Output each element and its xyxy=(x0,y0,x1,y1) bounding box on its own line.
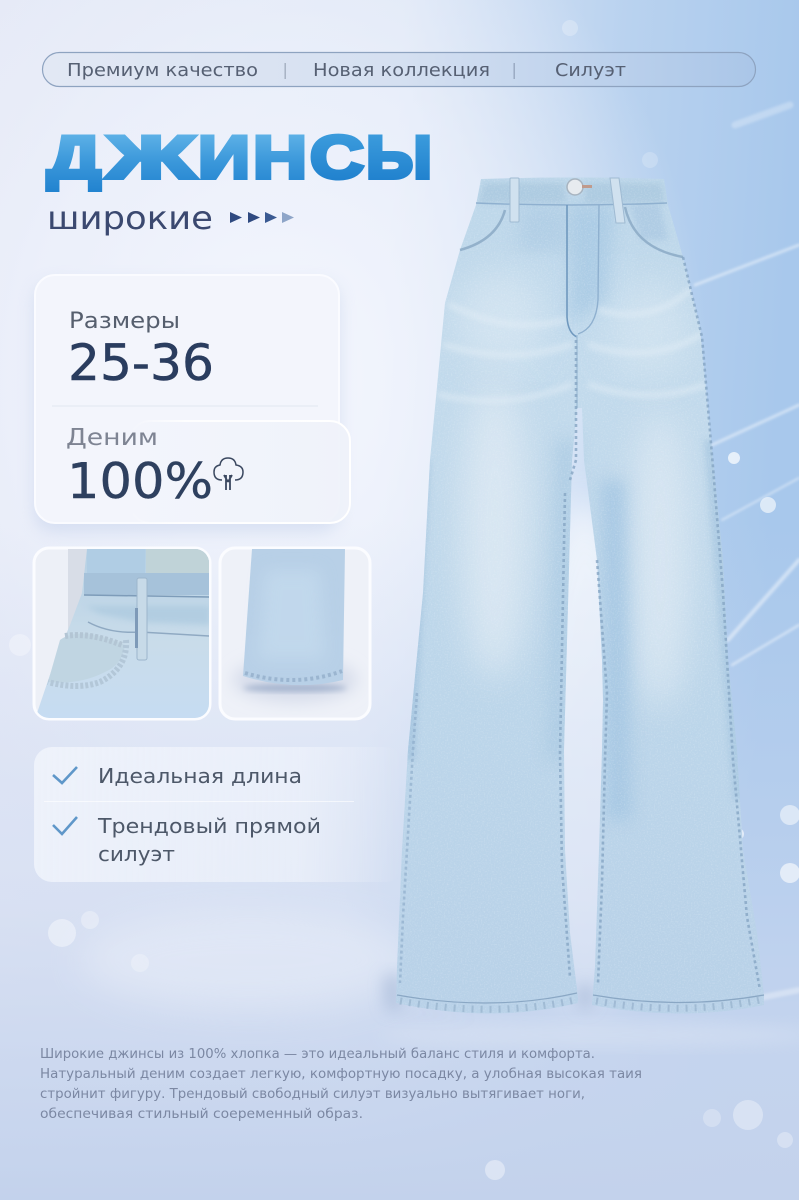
panel: sizes and denim card xyxy=(34,275,350,532)
title: Ж xyxy=(105,124,196,191)
icon: check 1 xyxy=(53,767,77,783)
feature: ideal length: Идеальная длина xyxy=(98,764,302,788)
denim shading xyxy=(395,170,770,1025)
title: И xyxy=(198,124,250,191)
description text: Широкие джинсы из 100% хлопка — это идеальный баланс стиля и комфорта. xyxy=(40,1046,595,1062)
pill label: premium quality: Премиум качество xyxy=(67,60,258,81)
product: wide leg jeans xyxy=(395,170,770,1025)
subtitle: широкие xyxy=(47,199,213,237)
belt loops xyxy=(510,178,625,223)
description text xyxy=(40,1046,642,1122)
feature: trendy straight silhouette: силуэт xyxy=(98,842,175,866)
top pill bar xyxy=(42,52,756,86)
sizes value: 25-36 xyxy=(68,334,214,392)
description text: стройнит фигуру. Трендовый свободный силуэт визуально вытягивает ноги, xyxy=(40,1086,585,1102)
pill label: silhouette: Силуэт xyxy=(555,60,626,81)
feature: trendy straight silhouette xyxy=(97,814,321,866)
title: Д xyxy=(47,124,101,191)
hem xyxy=(397,993,764,1003)
stitching xyxy=(400,257,760,990)
waistband and construction seams xyxy=(460,203,683,408)
title: Н xyxy=(253,124,307,191)
description text: обеспечивая стильный соеременный образ. xyxy=(40,1106,363,1122)
jeans shadow on floor xyxy=(384,975,593,1020)
sizes label: Размеры xyxy=(69,309,180,334)
denim label: Деним xyxy=(66,425,158,451)
title: С xyxy=(310,124,364,191)
description text: Натуральный деним создает легкую, комфортную посадку, а улобная высокая таия xyxy=(40,1066,642,1082)
button xyxy=(567,179,583,195)
title xyxy=(47,124,432,191)
whisker fades xyxy=(440,290,705,401)
denim value: 100% xyxy=(67,453,213,510)
panel: feature checklist xyxy=(34,747,404,882)
title: Ы xyxy=(366,124,432,191)
icon: cotton tree xyxy=(214,458,243,490)
panel: hem detail photo xyxy=(220,548,370,719)
icon: check 2 xyxy=(53,817,77,834)
feature: trendy straight silhouette: Трендовый прямой xyxy=(97,814,321,838)
pill label: new collection: Новая коллекция xyxy=(313,60,490,81)
icon: arrows xyxy=(230,212,294,223)
panel: pocket detail photo xyxy=(34,548,210,719)
